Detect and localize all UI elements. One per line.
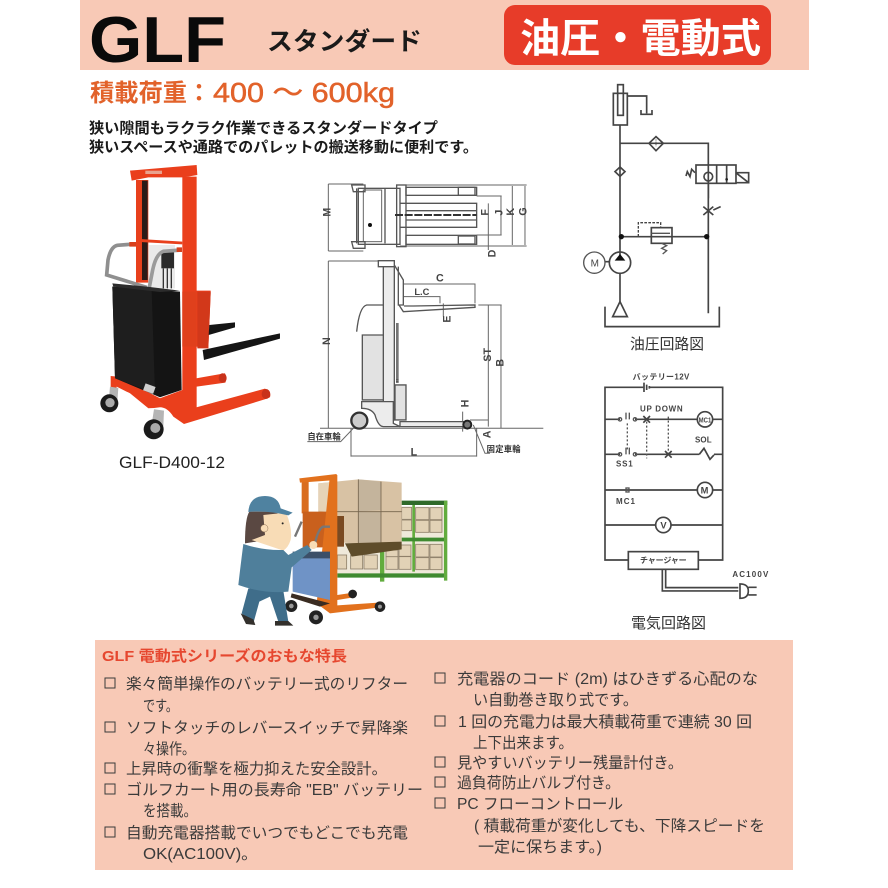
stacker (285, 474, 385, 624)
badge: hydraulic electric type: 油圧・電動式 (520, 17, 761, 61)
dimension letters: E (441, 316, 453, 323)
diagram: hydraulic circuit: M (591, 258, 599, 269)
list: features left column: OK(AC100V)。 (143, 846, 258, 863)
dimension letters: C (436, 273, 444, 285)
diagram: electric circuit: M (701, 485, 709, 495)
dimension letters: F (479, 209, 491, 216)
list: features right column: PC フローコントロール (457, 796, 623, 813)
dimension letters: 固定車輪 (487, 444, 521, 454)
panel: main features (95, 640, 793, 870)
list: features right column: ( 積載荷重が変化しても、下降スピードを (474, 817, 765, 835)
list: features right column: 上下出来ます。 (473, 734, 573, 752)
list: features left column: 楽々簡単操作のバッテリー式のリフター (126, 675, 408, 693)
panel: header band (80, 0, 809, 76)
heading: load capacity: 積載荷重 (90, 80, 187, 107)
list: features right column: 過負荷防止バルブ付き。 (457, 773, 620, 792)
dimension letters: H (459, 400, 471, 407)
diagram: electric circuit: バッテリー12V (633, 372, 690, 381)
list: features left column: 自動充電器搭載でいつでもどこでも充電 (126, 824, 408, 842)
heading: load capacity: 400 ～ 600kg (213, 77, 395, 108)
label: model name: GLF-D400-12 (119, 453, 225, 472)
text block: description: 狭いスペースや通路でのパレットの搬送移動に便利です。 (89, 138, 478, 156)
dimension letters: ST (482, 348, 494, 362)
list: features left column: ソフトタッチのレバースイッチで昇降楽 (126, 719, 408, 737)
dimension letters: M (322, 208, 334, 217)
text block: description: 狭い隙間もラクラク作業できるスタンダードタイプ (89, 119, 438, 137)
title: GLF: GLF (89, 3, 226, 76)
list: features right column: 充電器のコード (2m) はひきずる心配のな (457, 670, 758, 688)
list: features left column: 々操作。 (143, 740, 195, 758)
list: features right column: 一定に保ちます。) (478, 838, 602, 856)
diagram: electric circuit: SOL (695, 436, 712, 445)
list: features left column: ゴルフカート用の長寿命 "EB" バッテリー (126, 780, 423, 799)
dimension letters (307, 207, 530, 459)
diagram: electric circuit: SS1 (616, 460, 633, 469)
list: features right column: 見やすいバッテリー残量計付き。 (457, 754, 683, 772)
worker (238, 496, 317, 626)
side view (307, 261, 543, 457)
dimension letters: K (505, 208, 517, 216)
diagram: dimension drawing (307, 184, 543, 459)
dimension letters: 自在車輪 (307, 431, 341, 441)
dimension letters: A (482, 430, 494, 438)
dimension letters: N (321, 337, 333, 345)
caption: electric circuit: 電気回路図 (631, 615, 706, 632)
badge: hydraulic electric type (504, 5, 771, 65)
diagram: electric circuit (605, 372, 769, 598)
heading: load capacity: ： (187, 80, 211, 107)
diagram: electric circuit: MC1 (616, 497, 636, 506)
subtitle: standard: スタンダード (267, 27, 422, 56)
list: features left column: 上昇時の衝撃を極力抑えた安全設計。 (126, 760, 387, 778)
dimension letters: L (411, 447, 418, 459)
diagram: electric circuit: V (660, 520, 667, 530)
diagram: hydraulic circuit (584, 85, 749, 327)
diagram: electric circuit: AC100V (732, 570, 769, 579)
illustration: worker with stacker and shelves (238, 474, 447, 626)
dimension letters: L.C (414, 287, 430, 297)
diagram: electric circuit: MC1 (699, 415, 712, 424)
list: features left column: を搭載。 (143, 802, 197, 820)
list: features right column (435, 670, 765, 856)
list: features right column: 1 回の充電力は最大積載荷重で連続 30 回 (458, 713, 752, 731)
list: features right column: い自動巻き取り式です。 (473, 691, 638, 709)
top view (328, 184, 527, 251)
text block: description (89, 119, 478, 156)
shelf (337, 501, 447, 582)
list: features left column: です。 (143, 697, 178, 715)
caption: hydraulic circuit: 油圧回路図 (630, 336, 704, 353)
dimension letters: B (494, 359, 506, 367)
boxes (318, 479, 402, 557)
diagram: electric circuit: UP DOWN (640, 405, 683, 414)
dimension letters: D (486, 249, 498, 257)
dimension letters: G (518, 207, 530, 216)
diagram: electric circuit: チャージャー (640, 556, 687, 565)
illustration: red stacker product photo (100, 165, 280, 439)
heading: features: GLF 電動式シリーズのおもな特長 (102, 647, 347, 665)
list: features left column (105, 675, 423, 863)
dimension letters: J (493, 210, 505, 216)
heading: load capacity (90, 77, 395, 108)
